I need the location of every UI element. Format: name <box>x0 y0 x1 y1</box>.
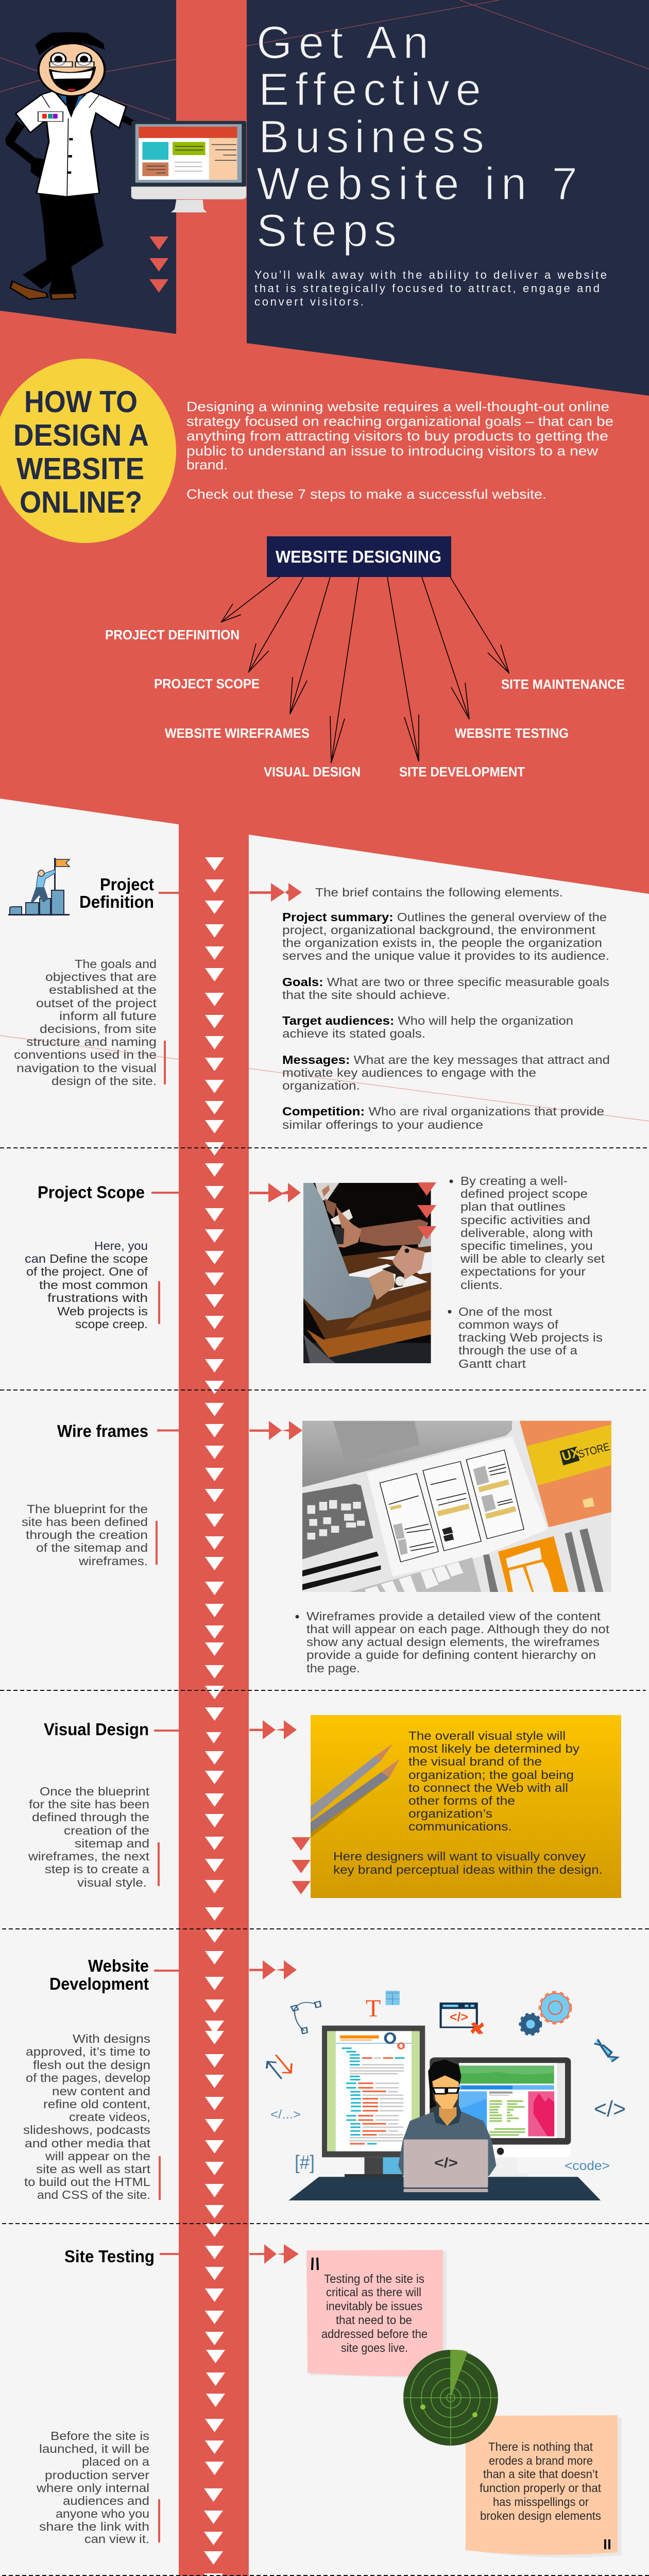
arrow <box>249 1720 297 1739</box>
left text: through the creation <box>26 1528 148 1541</box>
step labels: PROJECT SCOPE <box>154 676 260 691</box>
card text: key brand perceptual ideas within the design. <box>333 1863 603 1876</box>
subtitle: that is strategically focused to attract, engage and <box>254 282 600 295</box>
radar rings <box>403 2350 498 2446</box>
right monitor <box>430 2057 571 2177</box>
brief text: similar offerings to your audience <box>282 1118 483 1131</box>
left text: outset of the project <box>36 996 157 1010</box>
photo: wireframe sketches on desk <box>302 1421 611 1592</box>
heading: Definition <box>79 892 154 911</box>
panel: site testing <box>36 2244 622 2557</box>
title <box>257 16 577 256</box>
left text: objectives that are <box>45 970 157 984</box>
left text: site as well as start <box>36 2162 151 2176</box>
radar blips <box>420 2404 477 2417</box>
bullets: will be able to clearly set <box>460 1252 605 1265</box>
large gear teeth <box>540 1992 571 2023</box>
orange note text: broken design elements <box>480 2509 601 2522</box>
icon: chain link <box>594 2039 618 2062</box>
intro paragraph: strategy focused on reaching organizational goals – that can be <box>186 413 613 429</box>
panel: project scope <box>25 1174 605 1370</box>
connector <box>157 1429 179 1431</box>
bullets: defined project scope <box>460 1187 588 1200</box>
left text: visual style. <box>77 1876 147 1889</box>
icon: document <box>386 1991 400 2005</box>
pink note text: that need to be <box>336 2313 412 2327</box>
orange note <box>466 2415 618 2555</box>
icon: code window <box>440 2003 477 2027</box>
pale decorative diagonal <box>0 1036 649 1121</box>
pink note text <box>321 2272 428 2354</box>
step labels: SITE MAINTENANCE <box>501 676 625 692</box>
left text: of the sitemap and <box>36 1541 148 1554</box>
left text: can view it. <box>84 2532 149 2546</box>
icon: person planting flag on steps <box>8 858 70 916</box>
brief text: achieve its stated goals. <box>282 1027 425 1040</box>
connector <box>159 892 179 894</box>
red bar <box>164 1041 166 1084</box>
card text: organization; the goal being <box>408 1768 574 1782</box>
brief text: Messages: What are the key messages that attract and <box>282 1053 610 1066</box>
orange note text: function properly or that <box>480 2481 601 2495</box>
left text <box>22 1502 148 1568</box>
card text: Here designers will want to visually convey <box>333 1850 586 1863</box>
left text: Once the blueprint <box>40 1785 150 1798</box>
eyes <box>51 53 92 65</box>
heading <box>49 1956 149 1993</box>
left text: Before the site is <box>50 2429 149 2443</box>
arrow <box>249 1960 297 1979</box>
heading: Site Testing <box>64 2247 155 2266</box>
monitor stand <box>171 200 207 212</box>
bullets: specific activities and <box>460 1213 590 1227</box>
name tag <box>38 112 63 122</box>
large gear outline <box>541 1993 570 2022</box>
screen text lines <box>146 145 236 173</box>
heading: Project <box>100 875 154 894</box>
heading: Website <box>88 1956 149 1975</box>
small gear teeth <box>520 2014 541 2035</box>
quote mark <box>604 2539 610 2549</box>
left text: creation of the <box>64 1824 149 1837</box>
note shadow pink <box>308 2251 447 2378</box>
tongue <box>67 89 75 91</box>
curve handles <box>291 2002 321 2033</box>
red bar <box>158 2499 160 2543</box>
website designing box <box>267 536 451 577</box>
circle heading: WEBSITE <box>16 452 144 486</box>
screen header bar <box>139 127 237 138</box>
connector <box>151 1192 179 1194</box>
brief text: organization. <box>282 1079 360 1092</box>
mouth <box>49 66 96 92</box>
bullets: plan that outlines <box>460 1200 566 1213</box>
bullet text: show any actual design elements, the wireframes <box>306 1635 600 1649</box>
yellow card <box>311 1715 621 1898</box>
shoes <box>10 281 75 299</box>
orange note text: than a site that doesn’t <box>483 2467 598 2481</box>
left text: new content and <box>52 2084 150 2098</box>
bullet text <box>296 1609 610 1675</box>
illustration: desktop monitor <box>131 121 246 212</box>
pencils <box>311 1744 400 1838</box>
brief text: the organization exists in, the people the organization <box>282 936 602 950</box>
legs <box>23 193 104 293</box>
panel: project definition <box>8 858 610 1131</box>
book label UX: UX <box>560 1445 582 1464</box>
orange note text: erodes a brand more <box>489 2454 593 2467</box>
screen green block <box>173 142 206 155</box>
icon: bezier curve <box>295 2003 316 2031</box>
left text <box>23 2032 151 2201</box>
screen teal block <box>142 142 168 160</box>
icon: three red down triangles <box>149 236 168 293</box>
pupils <box>54 56 88 63</box>
tag: code: <code> <box>565 2159 610 2173</box>
section dividers <box>0 1148 649 2575</box>
intro paragraph: anything from attracting visitors to buy products to getting the <box>186 428 608 444</box>
red bar <box>158 1842 160 1886</box>
left text: structure and naming <box>26 1035 157 1048</box>
left text <box>28 1785 150 1889</box>
left text: share the link with <box>39 2520 149 2533</box>
orange note text: There is nothing that <box>488 2440 593 2453</box>
screen brown block <box>142 162 168 176</box>
connector <box>154 1970 179 1972</box>
left text: With designs <box>73 2032 150 2045</box>
pink note text: critical as there will <box>326 2285 421 2299</box>
intro paragraph: Designing a winning website requires a well-thought-out online <box>186 399 609 414</box>
arrow <box>249 1183 301 1202</box>
shirt and tie <box>58 93 85 113</box>
note shadow orange <box>469 2417 622 2557</box>
code glyph on laptop: </> <box>434 2155 458 2171</box>
intro paragraph <box>186 399 613 502</box>
left text: flesh out the design <box>33 2058 150 2072</box>
card text: The overall visual style will <box>408 1729 566 1742</box>
left text <box>36 2429 150 2546</box>
panel: wire frames <box>22 1421 611 1675</box>
left text: The blueprint for the <box>27 1502 148 1516</box>
left text: create videos, <box>69 2110 150 2124</box>
head <box>39 43 105 96</box>
subtitle <box>254 268 607 308</box>
brief text: motivate key audiences to engage with the <box>282 1066 536 1079</box>
circle heading: ONLINE? <box>20 485 142 519</box>
bullets: common ways of <box>458 1318 559 1331</box>
brief text <box>282 886 610 1131</box>
yellow circle: how to design a website online <box>0 359 176 543</box>
radar sweep <box>451 2350 468 2398</box>
card text: organization’s <box>408 1807 492 1820</box>
monitor frame <box>131 121 246 187</box>
connector <box>154 1730 179 1732</box>
left text: of the pages, develop <box>26 2071 150 2084</box>
left text: refine old content, <box>43 2097 150 2111</box>
brief text: Goals: What are two or three specific measurable goals <box>282 975 609 989</box>
left text: production server <box>45 2468 149 2482</box>
pink note text: Testing of the site is <box>324 2272 424 2285</box>
brief text: Competition: Who are rival organizations that provide <box>282 1105 604 1118</box>
left text: sitemap and <box>75 1837 149 1850</box>
connector <box>160 2253 179 2255</box>
icon: red down triangles <box>417 1182 436 1240</box>
bullet text: provide a guide for defining content hierarchy on <box>306 1648 596 1662</box>
card text: communications. <box>408 1820 512 1833</box>
left text: wireframes, the next <box>28 1850 150 1863</box>
card text: to connect the Web with all <box>408 1781 568 1794</box>
left text: navigation to the visual <box>16 1061 157 1075</box>
left text: anyone who you <box>56 2507 149 2520</box>
tag: hash: [#] <box>295 2152 315 2174</box>
letter T icon: T <box>366 1995 381 2022</box>
red bar <box>156 1521 158 1565</box>
left text: launched, it will be <box>39 2442 149 2455</box>
heading: Wire frames <box>57 1421 148 1440</box>
tag: closing code: </> <box>594 2096 626 2122</box>
arrows from box to step labels <box>221 577 509 763</box>
step labels: WEBSITE WIREFRAMES <box>165 725 310 741</box>
step labels: WEBSITE TESTING <box>455 725 569 741</box>
heading <box>79 875 154 911</box>
code glyph on window: </> <box>450 2010 468 2024</box>
step labels: SITE DEVELOPMENT <box>399 764 525 779</box>
monitor bezel <box>135 124 242 183</box>
bullets: Gantt chart <box>458 1357 526 1370</box>
page background <box>0 773 649 2576</box>
heading: Visual Design <box>44 1720 149 1739</box>
bullets: specific timelines, you <box>460 1239 593 1252</box>
left text: audiences and <box>63 2494 149 2507</box>
bullet text: Wireframes provide a detailed view of the content <box>306 1609 601 1623</box>
radar <box>403 2350 498 2446</box>
coat details <box>41 95 99 196</box>
book label STORE: STORE <box>577 1441 611 1461</box>
quote mark <box>311 2258 319 2270</box>
step labels <box>105 627 625 779</box>
left text: defined through the <box>32 1810 149 1824</box>
card text: the visual brand of the <box>408 1755 542 1768</box>
monitor screen <box>139 127 237 180</box>
header decorative lines <box>0 0 649 120</box>
left text: where only internal <box>36 2481 149 2495</box>
bullets <box>448 1174 605 1370</box>
left text: step is to create a <box>45 1862 150 1876</box>
left monitor <box>322 2026 425 2178</box>
hair <box>35 32 105 55</box>
left text: can Define the scope <box>25 1252 148 1265</box>
header background <box>0 0 649 412</box>
left text: will appear on the <box>45 2149 150 2163</box>
icon: wrench <box>471 2022 484 2034</box>
coat buttons <box>67 138 73 174</box>
title: Get An <box>257 16 429 68</box>
left text: conventions used in the <box>14 1048 157 1061</box>
bullet text: that will appear on each page. Although they do not <box>306 1622 610 1636</box>
laptop <box>404 2140 488 2192</box>
monitor chin <box>131 187 246 199</box>
circle heading: DESIGN A <box>13 418 149 452</box>
title: Effective <box>259 63 481 115</box>
photo: two people at wooden table <box>303 1183 431 1363</box>
brief text: Project summary: Outlines the general overview of the <box>282 910 607 924</box>
left text <box>14 957 157 1088</box>
subtitle: You’ll walk away with the ability to deliver a website <box>254 268 607 281</box>
pink note text: inevitably be issues <box>326 2299 422 2313</box>
left text: slideshows, podcasts <box>23 2123 150 2137</box>
card text: other forms of the <box>408 1794 515 1807</box>
icon: small blue gear <box>523 2017 538 2031</box>
left text: placed on a <box>82 2455 150 2468</box>
right arm <box>118 112 139 127</box>
illustration: cartoon man leaning on monitor <box>5 32 139 299</box>
left arm <box>5 121 50 178</box>
icon: swap arrows <box>267 2055 292 2079</box>
orange note text: has misspellings or <box>493 2495 589 2509</box>
icon: large orange gear <box>545 1997 566 2018</box>
left text: to build out the HTML <box>24 2175 150 2189</box>
developer <box>398 2059 496 2176</box>
white down triangles on timeline <box>204 857 225 2576</box>
title: Steps <box>257 205 397 256</box>
intro paragraph: Check out these 7 steps to make a successful website. <box>186 486 546 502</box>
bullets: One of the most <box>458 1305 553 1318</box>
screen grey lines <box>175 162 202 171</box>
bullets: expectations for your <box>460 1265 586 1278</box>
red bar <box>158 1281 160 1324</box>
arrow <box>249 1421 302 1440</box>
left text: for the site has been <box>29 1798 149 1811</box>
left text: Web projects is <box>57 1304 148 1318</box>
left text: the most common <box>39 1278 148 1292</box>
left text: approved, it’s time to <box>26 2045 150 2058</box>
left text: wireframes. <box>78 1554 148 1568</box>
left text: and CSS of the site. <box>37 2188 150 2201</box>
brief text: The brief contains the following elements. <box>315 886 563 899</box>
brief text: project, organizational background, the environment <box>282 923 596 937</box>
heading: Project Scope <box>38 1183 145 1201</box>
illustration: developer at desk <box>267 1991 618 2200</box>
card text: most likely be determined by <box>408 1742 579 1755</box>
arrow <box>249 2244 299 2264</box>
panel: visual design <box>28 1715 621 1898</box>
teeth <box>52 71 93 79</box>
left text: scope creep. <box>75 1317 148 1331</box>
bullet text: the page. <box>306 1662 360 1675</box>
website designing box: WEBSITE DESIGNING <box>276 547 441 566</box>
pink note text: site goes live. <box>341 2341 408 2354</box>
intro paragraph: public to understand an issue to introducing visitors to a new <box>186 443 598 459</box>
arrow <box>249 883 302 902</box>
brief text: Target audiences: Who will help the organization <box>282 1014 573 1027</box>
left text: The goals and <box>75 957 157 971</box>
left text: site has been defined <box>22 1515 148 1529</box>
icon: red down triangles <box>292 1837 311 1894</box>
card text <box>333 1729 603 1876</box>
step labels: VISUAL DESIGN <box>264 764 361 779</box>
left text: established at the <box>49 983 157 996</box>
left text: and other media that <box>25 2137 151 2150</box>
left text: of the project. One of <box>26 1265 148 1278</box>
tag: ellipsis code: </...> <box>270 2108 301 2122</box>
left text: inform all future <box>59 1009 157 1023</box>
left text: frustrations with <box>47 1291 148 1304</box>
brief text: that the site should achieve. <box>282 988 450 1002</box>
orange note text <box>480 2440 601 2522</box>
brief text: serves and the unique value it provides to its audience. <box>282 949 609 962</box>
lab coat <box>16 91 126 197</box>
left text <box>25 1239 148 1331</box>
circle heading <box>13 385 149 519</box>
title: Website in 7 <box>257 158 577 209</box>
pink note <box>306 2250 443 2376</box>
pink note text: addressed before the <box>321 2327 428 2341</box>
red bar <box>159 2156 161 2200</box>
screen side panel <box>209 138 237 180</box>
bullets: through the use of a <box>458 1344 578 1357</box>
glasses <box>49 62 94 67</box>
left text: design of the site. <box>52 1074 157 1088</box>
left text: Here, you <box>94 1239 148 1252</box>
left text: decisions, from site <box>40 1022 157 1036</box>
intro paragraph: brand. <box>186 457 228 472</box>
bullets: clients. <box>460 1278 503 1292</box>
desk <box>288 2177 601 2200</box>
bullets: tracking Web projects is <box>458 1331 603 1344</box>
title: Business <box>259 111 484 162</box>
subtitle: convert visitors. <box>254 295 364 308</box>
heading: Development <box>49 1974 149 1993</box>
step labels: PROJECT DEFINITION <box>105 627 240 642</box>
bullets: By creating a well- <box>460 1174 568 1188</box>
panel: website development <box>23 1956 626 2201</box>
circle heading: HOW TO <box>24 385 138 419</box>
bullets: deliverable, along with <box>460 1226 593 1240</box>
